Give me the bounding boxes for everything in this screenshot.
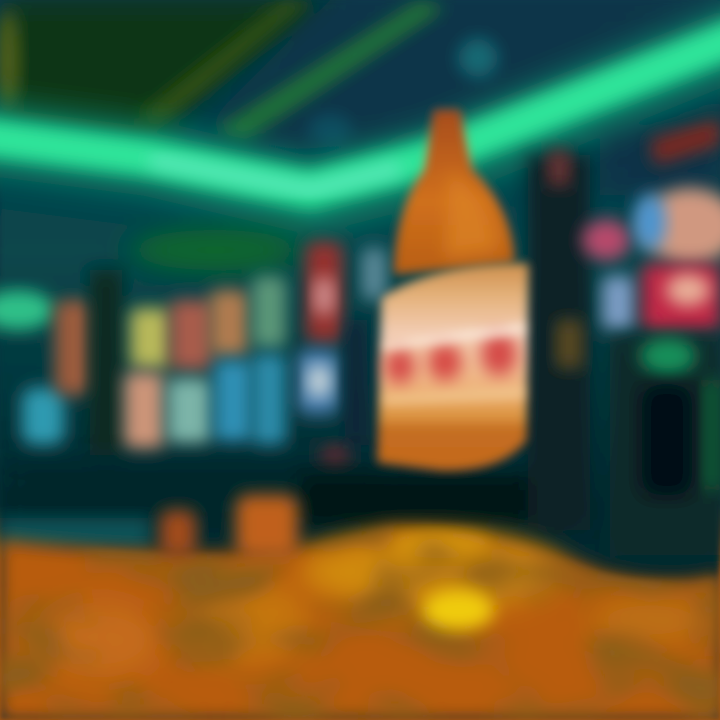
right side neon signs bbox=[582, 118, 720, 330]
bottle-shaped machine topper bbox=[394, 110, 514, 274]
dark floor band bbox=[0, 462, 560, 550]
right dark doorway bbox=[610, 335, 720, 555]
gold coin pile bbox=[0, 520, 720, 720]
neon green band bbox=[0, 32, 720, 196]
right upper dark wall bbox=[600, 125, 720, 195]
row of slot machines bbox=[22, 242, 386, 474]
glowing yellow highlight bbox=[422, 590, 494, 630]
ceiling bbox=[0, 0, 720, 150]
gold coin stacks bbox=[160, 495, 298, 557]
under-ceiling green shade bbox=[0, 230, 300, 330]
dark pillars bbox=[528, 150, 590, 530]
main slot machine bbox=[378, 264, 528, 470]
